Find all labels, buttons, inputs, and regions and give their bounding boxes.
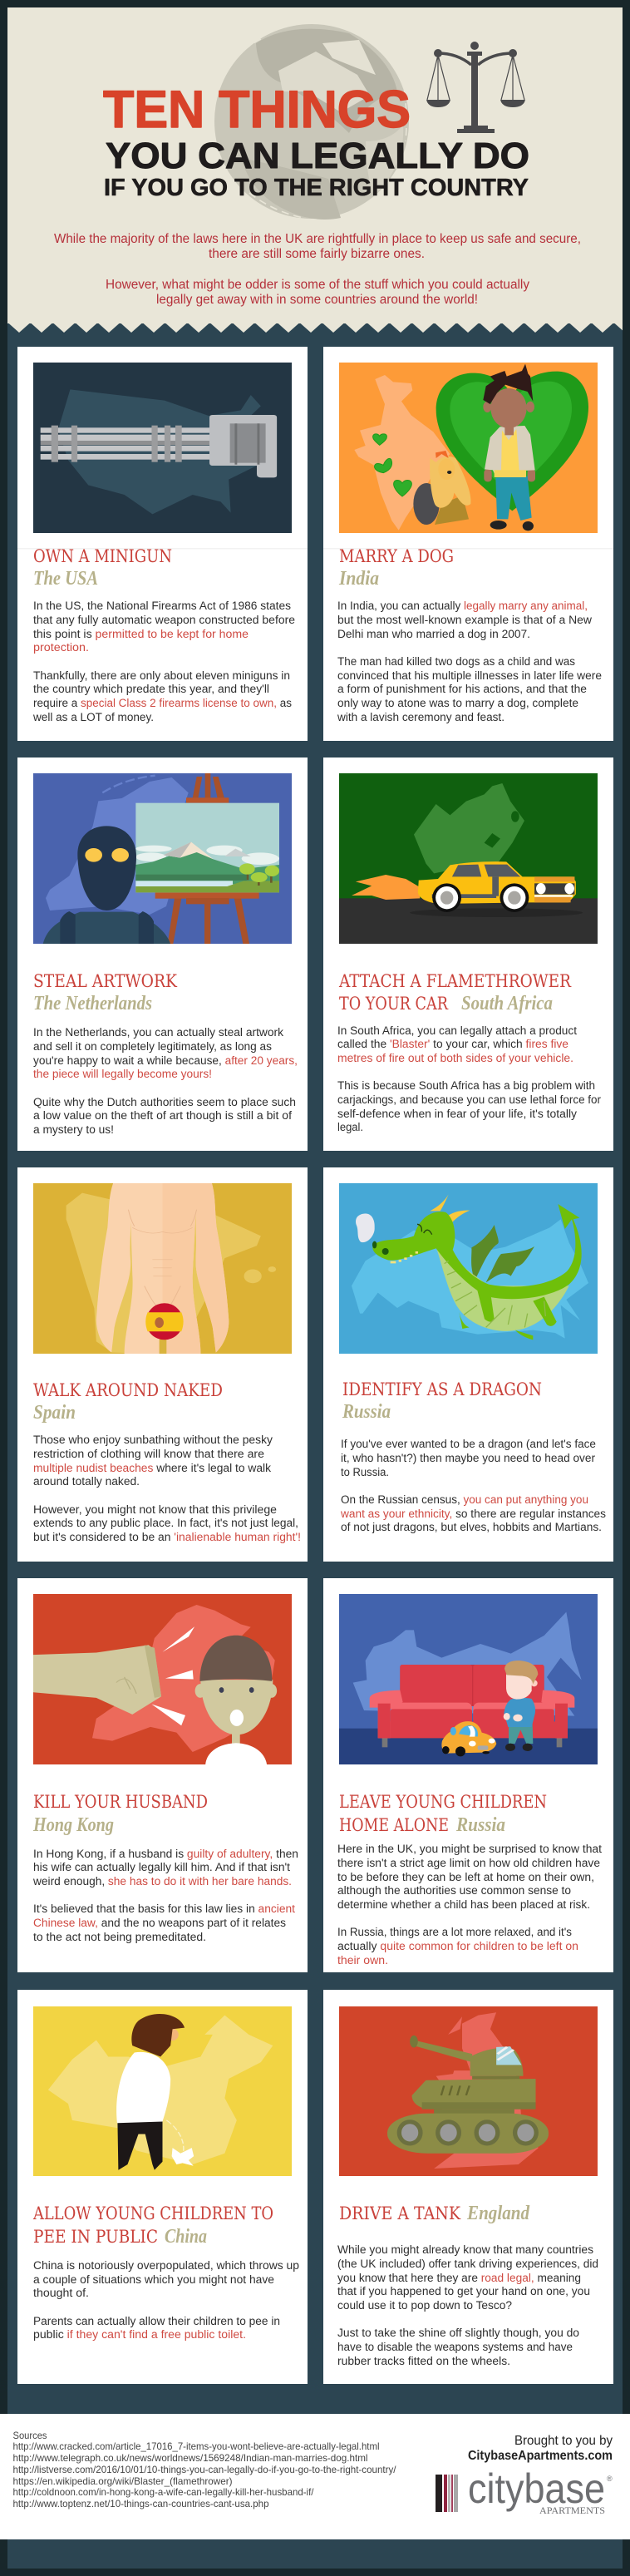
illustration: minigun over USA map [33,363,292,533]
icon: scales of justice [426,42,525,133]
heading: STEAL ARTWORK [33,971,177,991]
body text: around totally naked. [33,1475,140,1488]
title: IF YOU GO TO THE RIGHT COUNTRY [104,175,529,201]
body text: legal. [337,1121,363,1133]
sources list: http://listverse.com/2016/10/01/10-things-you-can-legally-do-if-you-go-to-the-right-country/ [13,2464,396,2475]
panel: marry a dog [323,347,613,741]
body text: called the 'Blaster' to your car, which fires five [337,1038,568,1050]
heading [32,2203,273,2247]
title: YOU CAN LEGALLY DO [106,136,529,176]
body text: In the US, the National Firearms Act of 1986 states [33,600,291,612]
body text: The man had killed two dogs as a child and was [337,655,575,668]
body text: well as a LOT of money. [32,711,154,723]
body text: that if you happened to get your hand on one, you [337,2285,590,2297]
body text [33,1026,298,1136]
body text: rubber tracks fitted on the wheels. [337,2355,510,2367]
citybase logo: citybase [468,2465,605,2512]
body text: actually quite common for children to be left on [337,1940,578,1952]
body text: If you've ever wanted to be a dragon (and let's face [341,1438,596,1450]
sources list: http://www.telegraph.co.uk/news/worldnews/1569248/Indian-man-marries-dog.html [13,2452,367,2464]
body text: However, you might not know that this privilege [33,1503,277,1516]
body text: it, who hasn't?) then maybe you need to head over [341,1452,596,1464]
body text: the country which predate this year, and they'll [33,683,269,695]
body text: although the authorities use common sense to [337,1884,571,1897]
credit: Brought to you by [514,2434,613,2448]
illustration: fist punching man over Hong Kong map [33,1594,292,1764]
heading: OWN A MINIGUN [33,546,172,566]
body text: On the Russian census, you can put anything you [341,1493,588,1506]
body text: (the UK included) offer tank driving experiences, did [337,2258,598,2270]
body text: there isn't a strict age limit on how old children have [337,1857,600,1869]
body text [337,1024,602,1133]
intro text: legally get away with in some countries around the world! [156,293,478,307]
body text: Just to take the shine off slightly though, you do [337,2327,579,2339]
panel: identify as a dragon [323,1167,613,1562]
body text: determine whether a child has been placed at risk. [337,1898,590,1911]
body text: In South Africa, you can legally attach a product [337,1024,577,1037]
panel: kill your husband [17,1578,308,1972]
intro text: However, what might be odder is some of the stuff which you could actually [106,278,529,292]
citybase logo: APARTMENTS [539,2506,605,2516]
intro text [54,232,581,307]
body text: want as your ethnicity, so there are regular instances [340,1508,606,1520]
body text: but the most well-known example is that of a New [337,614,592,626]
illustration: dragon over Russia map [339,1183,598,1354]
body text [33,2259,299,2341]
heading: ALLOW YOUNG CHILDREN TO [32,2203,273,2223]
body text [33,1434,301,1543]
body text [337,1843,602,1967]
panel: attach a flamethrower [323,758,613,1151]
sources list: https://en.wikipedia.org/wiki/Blaster_(flamethrower) [13,2475,233,2487]
sources list: http://coldnoon.com/in-hong-kong-a-wife-can-legally-kill-her-husband-if/ [13,2486,314,2498]
body text: In Hong Kong, if a husband is guilty of adultery, then [33,1848,298,1860]
heading: WALK AROUND NAKED [33,1380,223,1400]
body text: to the act not being premeditated. [33,1931,206,1943]
body text: but it's considered to be an 'inalienable human right'! [33,1531,301,1543]
citybase logo: ® [607,2475,613,2483]
body text: could use it to pop down to Tesco? [337,2299,512,2312]
body text: have to disable the weapons systems and have [337,2341,573,2353]
body text: metres of fire out of both sides of your vehicle. [337,1052,573,1064]
body text: to be before they can be left at home on their own, [337,1871,594,1883]
heading [339,1792,547,1835]
body text: protection. [33,641,89,654]
body text [337,600,602,723]
sources list: http://www.toptenz.net/10-things-can-countries-cant-usa.php [13,2498,269,2509]
body text: multiple nudist beaches where it's legal to walk [33,1462,271,1474]
icon: globe [214,24,409,220]
heading: KILL YOUR HUSBAND [33,1792,208,1812]
sources list [13,2430,396,2509]
heading: IDENTIFY AS A DRAGON [342,1379,542,1399]
body text: weird enough, she has to do it with her bare hands. [32,1875,292,1888]
illustration: car with flamethrower over South Africa map [339,773,598,944]
body text [340,1438,606,1533]
country: The Netherlands [33,993,152,1014]
illustration: naked man with Spanish flag over Spain map [33,1183,292,1354]
body text: thought of. [33,2287,89,2299]
body text: their own. [337,1954,388,1967]
heading [338,971,572,1014]
heading: PEE IN PUBLIC [33,2227,158,2247]
body text: convinced that his multiple illnesses in later life were [337,669,602,682]
body text [32,600,295,723]
panel: own a minigun [17,347,308,741]
illustration: boy on sofa with toy car over Russia map [339,1594,598,1764]
country: England [466,2203,530,2224]
body text: Thankfully, there are only about eleven miniguns in [33,669,290,682]
panel: allow young children to pee in public [17,1990,308,2384]
panel: steal artwork [17,758,308,1151]
body text: restriction of clothing will know that there are [33,1448,264,1460]
country: Russia [455,1814,505,1836]
body text: Those who enjoy sunbathing without the pesky [33,1434,273,1446]
illustration: tank over UK map [339,2006,598,2176]
body text: Delhi man who married a dog in 2007. [337,628,530,640]
body text: public if they can't find a free public toilet. [33,2328,246,2341]
body text: Parents can actually allow their children to pee in [33,2315,280,2327]
credit: CitybaseApartments.com [468,2449,613,2463]
body text: a couple of situations which you might not have [33,2273,274,2286]
body text: While you might already know that many countries [337,2243,593,2256]
body text: Chinese law, and the no weapons part of it relates [33,1917,286,1929]
body text: a form of punishment for his actions, and that the [337,683,587,695]
country: China [165,2226,207,2248]
body text: This is because South Africa has a big problem with [337,1079,595,1092]
body text [32,1848,298,1943]
sources list: Sources [13,2430,47,2441]
panel: leave young children home alone [323,1578,613,1972]
body text: Here in the UK, you might be surprised to know that [337,1843,602,1855]
body text [337,2243,598,2367]
body text: a low value on the theft of art though is still a bit of [33,1109,292,1122]
heading: LEAVE YOUNG CHILDREN [339,1792,547,1812]
body text: carjackings, and because you can use lethal force for [337,1093,602,1106]
country: Russia [342,1401,391,1423]
credit [468,2434,613,2463]
panel: walk around naked [17,1167,308,1562]
body text: It's believed that the basis for this law lies in ancient [33,1902,295,1915]
body text: In the Netherlands, you can actually steal artwork [33,1026,283,1039]
illustration: man, dog and heart over India map [339,363,598,533]
country: Spain [33,1402,76,1424]
intro text: there are still some fairly bizarre ones. [209,247,425,261]
body text: you know that here they are road legal, meaning [337,2272,581,2284]
body text: to Russia. [341,1466,389,1478]
body text: of not just dragons, but elves, hobbits and Martians. [341,1521,602,1533]
body text: self-defence when in fear of your life, it's totally [337,1108,577,1120]
body text: extends to any public place. In fact, it's not just legal, [33,1517,298,1529]
sources list: http://www.cracked.com/article_17016_7-items-you-wont-believe-are-actually-legal.html [13,2440,379,2452]
illustration: child peeing over China map [33,2006,292,2176]
heading: MARRY A DOG [339,546,454,566]
body text: this point is permitted to be kept for home [33,628,249,640]
body text: his wife can actually legally kill him. And if that isn't [33,1861,290,1873]
title [103,81,529,201]
heading: TO YOUR CAR [339,994,449,1014]
country: The USA [33,568,98,590]
body text: Quite why the Dutch authorities seem to place such [33,1096,296,1108]
body text: with a lavish ceremony and feast. [337,711,504,723]
heading: ATTACH A FLAMETHROWER [338,971,572,991]
body text: require a special Class 2 firearms license to own, as [33,697,292,709]
country: South Africa [461,993,553,1014]
title: TEN THINGS [103,81,411,139]
panel: footer [0,2414,630,2539]
body text: you're happy to wait a while because, after 20 years, [33,1054,298,1067]
country: Hong Kong [32,1814,114,1836]
body text: China is notoriously overpopulated, which throws up [33,2259,299,2272]
intro text: While the majority of the laws here in the UK are rightfully in place to keep us safe and secure, [54,232,581,246]
country: India [338,568,379,590]
panel: drive a tank [323,1990,613,2384]
illustration: masked thief and painting over Netherlands map [33,773,292,944]
heading: HOME ALONE [339,1815,449,1835]
body text: In Russia, things are a lot more relaxed, and it's [337,1926,572,1938]
body text: only way to atone was to marry a dog, complete [337,697,578,709]
body text: that any fully automatic weapon constructed before [33,614,295,626]
body text: In India, you can actually legally marry any animal, [337,600,588,612]
heading: DRIVE A TANK [339,2203,460,2223]
body text: a mystery to us! [33,1123,114,1136]
body text: the piece will legally become yours! [33,1068,212,1080]
body text: and sell it on completely legitimately, as long as [33,1040,272,1053]
